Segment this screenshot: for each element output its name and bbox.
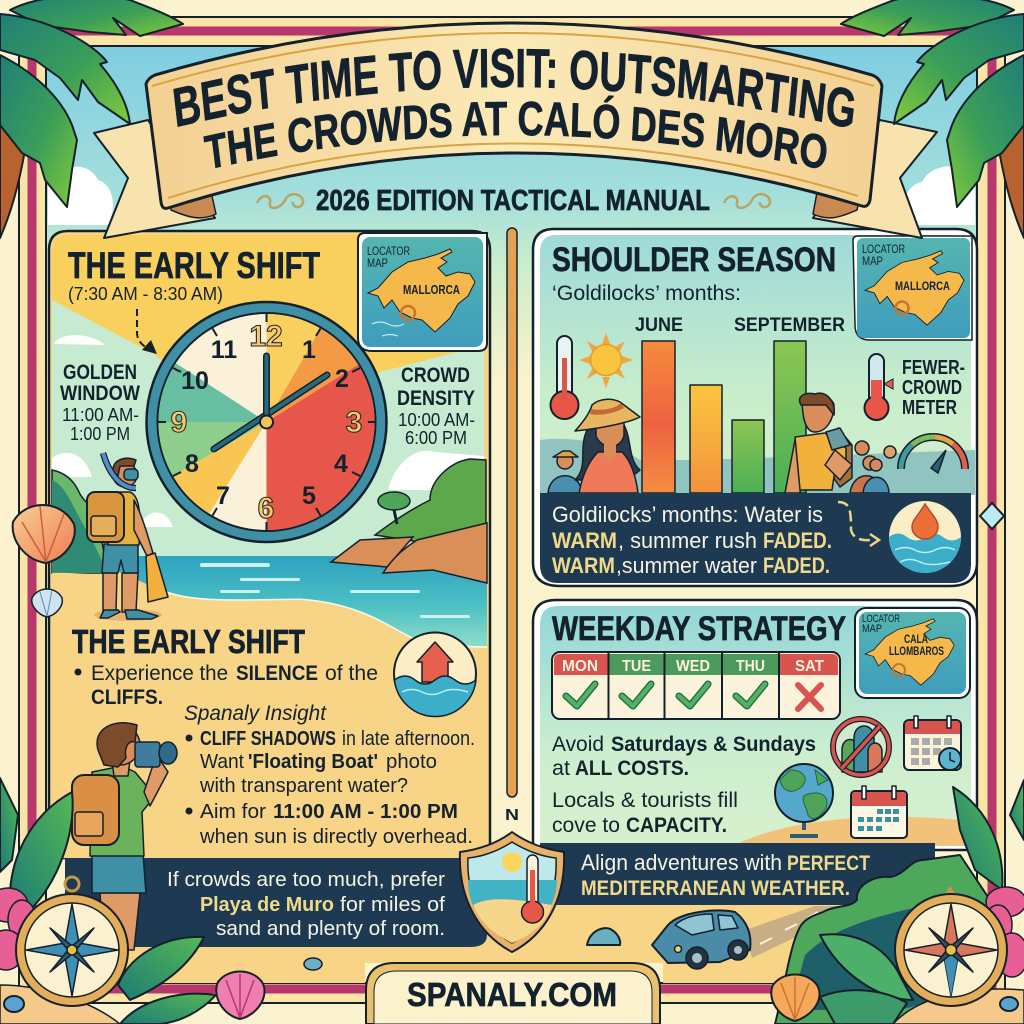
locator map: LOCATOR	[367, 244, 410, 258]
heading: THE EARLY SHIFT	[68, 245, 320, 286]
palm fronds right	[841, 0, 1024, 207]
insight band: , summer rush	[618, 528, 757, 553]
clock numerals: 5	[302, 482, 316, 510]
panel base	[49, 231, 490, 858]
icon: rising tide	[394, 632, 476, 716]
insight band: WARM	[552, 553, 615, 578]
spanaly insight: when sun is directly overhead.	[199, 826, 473, 848]
man with backpack	[785, 393, 852, 493]
clock numerals: 6	[258, 492, 274, 525]
clock numerals: 12	[249, 320, 283, 353]
golden window label: 11:00 AM-	[62, 405, 139, 425]
weekly calendar: WED	[676, 658, 710, 675]
avoid weekends text: Avoid	[552, 733, 604, 756]
snorkeler figure	[87, 453, 168, 621]
weekly calendar: MON	[562, 658, 598, 675]
weekly calendar: SAT	[795, 658, 824, 675]
locator map	[358, 233, 487, 351]
section heading lower: THE EARLY SHIFT	[72, 623, 305, 660]
callout: perfect mediterranean weather	[540, 843, 935, 905]
locator map: CALA	[904, 634, 928, 646]
spanaly insight: Aim for	[200, 801, 266, 823]
dashed yellow arrow	[838, 502, 879, 546]
shell pink	[216, 972, 265, 1019]
bullet: silence of the cliffs: SILENCE	[236, 662, 318, 685]
sea	[115, 556, 487, 646]
crowd density label: CROWD	[401, 364, 470, 387]
icon: thermometer	[550, 336, 578, 419]
spanaly insight: with transparent water?	[199, 775, 408, 797]
icon: calendar with clock	[904, 716, 961, 770]
ornament left	[257, 194, 303, 208]
locator map: MALLORCA	[895, 279, 950, 293]
bar chart: SEPTEMBER	[734, 315, 845, 336]
dashed arrow to clock	[137, 309, 157, 354]
golden window label	[60, 361, 140, 444]
golden window label: 1:00 PM	[70, 424, 130, 444]
icon: warm water	[889, 501, 961, 573]
weather shield badge	[460, 832, 564, 952]
clouds in scene	[52, 335, 484, 527]
back hills	[540, 439, 975, 495]
rock	[587, 928, 620, 945]
crowd density label: DENSITY	[397, 387, 475, 410]
frame diamond	[980, 503, 1004, 529]
callout: playa de muro	[65, 858, 487, 947]
beach ground lower	[100, 858, 965, 983]
time range: (7:30 AM - 8:30 AM)	[68, 284, 223, 304]
title line one: BEST TIME TO VISIT: OUTSMARTING	[173, 48, 854, 127]
capacity text: CAPACITY.	[626, 814, 727, 837]
compass right	[895, 886, 1007, 1006]
shoreline	[160, 590, 487, 648]
avoid weekends text	[552, 733, 816, 780]
icon: globe	[775, 764, 833, 836]
right foliage	[775, 780, 1024, 1024]
callout: playa de muro: sand and plenty of room.	[216, 918, 445, 940]
capacity text: Locals & tourists fill	[552, 789, 738, 812]
avoid weekends text: at	[552, 757, 570, 780]
heading: SHOULDER SEASON	[552, 241, 836, 279]
left foliage	[0, 778, 216, 1024]
locator map: MALLORCA	[403, 282, 460, 297]
pebble	[304, 958, 322, 970]
avoid weekends text: Saturdays & Sundays	[611, 733, 816, 756]
avoid weekends text: ALL COSTS.	[575, 757, 689, 780]
palm fronds left	[0, 0, 183, 207]
locator map	[853, 236, 972, 340]
clock	[146, 302, 386, 542]
insight band: FADED.	[763, 553, 830, 578]
center divider	[507, 228, 517, 797]
locator map: MAP	[367, 256, 388, 270]
golden window label: WINDOW	[60, 382, 140, 405]
fewer-crowd meter label: FEWER-	[902, 357, 965, 379]
subtitle: 2026 EDITION TACTICAL MANUAL	[316, 185, 710, 217]
callout: playa de muro: Playa de Muro	[200, 894, 334, 916]
banner left tail	[94, 120, 216, 238]
title banner	[144, 22, 884, 210]
road	[745, 906, 850, 958]
clock numerals: 9	[171, 406, 187, 439]
insight band: Goldilocks’ months: Water is	[552, 502, 823, 527]
spanaly insight: Want	[200, 751, 244, 773]
blue shell left	[32, 589, 62, 617]
yellow sun ray	[52, 235, 484, 430]
crowd gauge	[901, 437, 965, 473]
clock numerals: 2	[335, 365, 349, 393]
left sand mound	[0, 985, 120, 1024]
icon: sun	[579, 333, 633, 388]
panel base	[533, 229, 977, 586]
locator map: LLOMBAROS	[889, 646, 944, 658]
car	[652, 911, 750, 969]
shell orange	[771, 974, 820, 1021]
insight band: FADED.	[763, 528, 832, 553]
left flower	[0, 888, 36, 970]
hill	[52, 470, 108, 573]
clock numerals: 4	[334, 450, 348, 478]
panel: weekday strategy	[533, 600, 977, 850]
bar chart	[635, 315, 845, 493]
weekly calendar: TUE	[622, 658, 651, 675]
callout: perfect mediterranean weather: PERFECT	[787, 852, 870, 875]
spanaly insight: 'Floating Boat'	[248, 751, 378, 773]
bullet: silence of the cliffs: CLIFFS.	[91, 686, 163, 709]
crowd density label: 6:00 PM	[405, 428, 467, 448]
fewer-crowd meter label: CROWD	[902, 377, 962, 399]
pebble	[1000, 997, 1018, 1011]
scene sky	[52, 300, 484, 570]
clock numerals: 1	[302, 336, 316, 364]
clock numerals: 11	[211, 336, 237, 364]
crowd density label	[397, 364, 475, 448]
sand mound	[735, 817, 971, 846]
bar chart: JUNE	[635, 315, 683, 336]
clock numerals: 10	[181, 367, 209, 395]
right flower	[984, 887, 1024, 977]
website pill: SPANALY.COM	[407, 976, 617, 1013]
bullet: silence of the cliffs: Experience the	[91, 662, 228, 685]
golden window label: GOLDEN	[63, 361, 137, 384]
heading: WEEKDAY STRATEGY	[552, 610, 846, 648]
photographer figure	[72, 723, 177, 950]
clock hands	[214, 356, 327, 449]
capacity text: cove to	[552, 814, 620, 837]
insight band: ,summer water	[616, 553, 757, 578]
orange shell left	[13, 505, 75, 563]
foam highlights	[200, 563, 470, 618]
fewer-crowd meter label: METER	[902, 397, 957, 419]
insight band: WARM	[552, 528, 617, 553]
spanaly insight: CLIFF SHADOWS	[200, 728, 336, 750]
banner right tail	[813, 120, 937, 238]
clock numerals: 8	[185, 450, 199, 478]
weekly calendar: THU	[736, 658, 765, 675]
palm trunk right	[999, 95, 1024, 238]
compass left	[16, 877, 128, 1006]
spanaly insight: in late afternoon.	[342, 728, 475, 750]
website pill	[366, 963, 660, 1024]
locator map: MAP	[862, 623, 882, 635]
bullet: silence of the cliffs	[74, 662, 378, 709]
pebble	[4, 996, 24, 1012]
locator map: MAP	[862, 256, 883, 268]
callout: playa de muro: for miles of	[340, 894, 445, 916]
north marker: N	[505, 807, 519, 824]
woman with sun hat	[575, 399, 640, 493]
cliffs and vegetation	[331, 459, 487, 583]
icon: calendar	[851, 786, 907, 838]
icon: fewer-crowd thermometer	[864, 354, 893, 420]
callout: perfect mediterranean weather: Align adventures with	[581, 850, 782, 875]
weekly calendar	[552, 652, 840, 719]
icon: no crowds	[833, 719, 889, 775]
callout: playa de muro: If crowds are too much, prefer	[167, 869, 445, 891]
crowd silhouettes	[850, 441, 896, 493]
panel: the early shift	[49, 231, 490, 858]
bullet: silence of the cliffs: of the	[325, 662, 378, 685]
panel base	[533, 600, 977, 850]
palm trunk left	[0, 95, 25, 238]
clouds	[48, 166, 975, 225]
subheading: ‘Goldilocks’ months:	[552, 282, 741, 305]
locator map: LOCATOR	[862, 244, 905, 256]
spanaly insight	[184, 702, 475, 848]
spanaly insight: 11:00 AM - 1:00 PM	[273, 801, 458, 823]
right sand mound	[893, 989, 1024, 1024]
callout: perfect mediterranean weather: MEDITERRANEAN WEATHER.	[581, 877, 850, 900]
capacity text	[552, 789, 738, 837]
title line two: THE CROWDS AT CALÓ DES MORO	[203, 95, 827, 168]
crowd density label: 10:00 AM-	[398, 410, 475, 430]
panel: shoulder season	[533, 229, 977, 586]
clock numerals	[171, 320, 362, 525]
insight band	[540, 493, 971, 583]
locator map: LOCATOR	[862, 613, 900, 625]
clock numerals: 7	[216, 482, 230, 510]
spanaly insight: photo	[386, 751, 437, 773]
small tourist	[548, 451, 582, 493]
locator map	[855, 608, 970, 698]
fewer-crowd meter label	[902, 357, 965, 419]
sand left	[52, 573, 487, 858]
clock numerals: 3	[346, 406, 362, 439]
ornament right	[724, 194, 770, 208]
spanaly insight: Spanaly Insight	[184, 702, 327, 725]
